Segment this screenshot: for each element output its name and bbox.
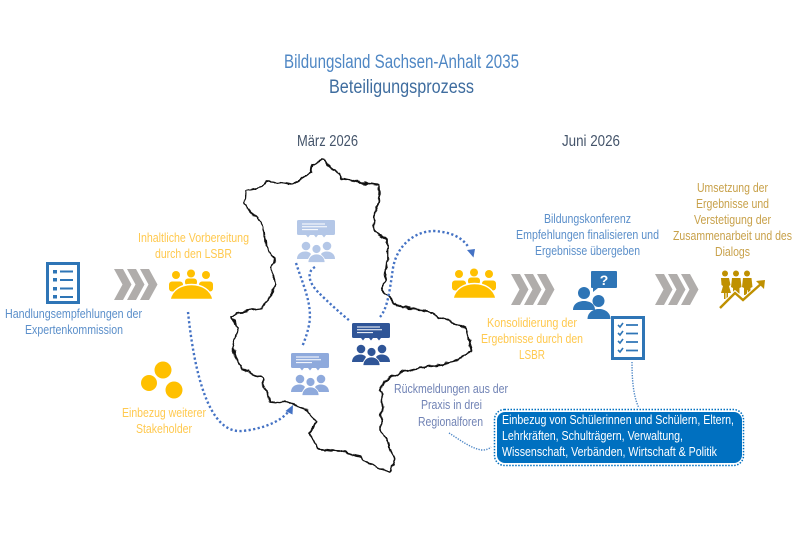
text: Umsetzung: Dialogs — [715, 244, 750, 259]
arrow: dotted Rückmeldungen to box — [449, 433, 491, 450]
arrow: dotted north to south — [296, 263, 310, 347]
text: Bildungskonferenz: Bildungskonferenz — [544, 211, 631, 226]
text: Handlungsempfehlungen: Expertenkommission — [25, 322, 123, 337]
title — [284, 52, 519, 98]
callout: Einbezug: Lehrkräften, Schulträgern, Verwaltung, — [502, 428, 683, 443]
arrow: chevrons 1 — [114, 269, 158, 300]
map outline: Sachsen-Anhalt — [231, 160, 472, 472]
icon: forum centre — [352, 323, 390, 366]
date: Juni 2026: Juni 2026 — [562, 133, 620, 150]
text: Umsetzung: Ergebnisse und — [696, 196, 769, 211]
date: März 2026: März 2026 — [297, 133, 358, 150]
icon: stakeholder circles — [141, 362, 182, 398]
text: Inhaltliche Vorbereitung — [138, 230, 249, 261]
text: Handlungsempfehlungen — [5, 306, 143, 337]
text: Inhaltliche Vorbereitung: durch den LSBR — [155, 246, 232, 261]
icon: people with question: ? — [600, 272, 608, 288]
icon: people with rising arrow — [720, 270, 765, 308]
text: Rückmeldungen — [394, 381, 509, 429]
callout: Einbezug — [494, 410, 744, 466]
title: Bildungsland Sachsen-Anhalt 2035 — [284, 52, 519, 73]
arrow: chevrons 3 — [655, 274, 698, 305]
title: Beteiligungsprozess — [329, 77, 474, 98]
text: Bildungskonferenz: Empfehlungen finalisieren und — [516, 227, 659, 242]
icon: people with question — [573, 271, 617, 319]
icon: document list — [48, 264, 78, 302]
arrow: dotted north to centre — [310, 267, 350, 321]
callout: Einbezug: Einbezug von Schülerinnen und Schülern, Eltern, — [502, 412, 734, 427]
text: Einbezug weiterer Stakeholder: Stakeholder — [136, 421, 193, 436]
icon: forum south — [291, 353, 329, 396]
icon: meeting table consolidation — [452, 268, 496, 298]
text: Rückmeldungen: Praxis in drei — [421, 397, 482, 412]
text: Bildungskonferenz — [516, 211, 659, 258]
text: Konsolidierung — [481, 315, 583, 362]
text: Bildungskonferenz: Ergebnisse übergeben — [535, 243, 640, 258]
text: Umsetzung — [673, 180, 792, 259]
text: Einbezug weiterer Stakeholder — [122, 405, 207, 436]
arrow: dotted centre to consolidation — [380, 231, 475, 317]
icon: checklist — [612, 318, 644, 358]
text: Handlungsempfehlungen: Handlungsempfehlungen der — [5, 306, 143, 321]
arrow: dotted to south forum — [188, 312, 293, 431]
text: Konsolidierung: Konsolidierung der — [487, 315, 578, 330]
arrow: dotted checklist to box — [632, 362, 639, 408]
text: Konsolidierung: Ergebnisse durch den — [481, 331, 583, 346]
text: Rückmeldungen: Regionalforen — [418, 414, 483, 429]
icon: meeting table LSBR — [169, 270, 213, 300]
arrow: chevrons 2 — [511, 274, 554, 305]
icon: forum north — [297, 220, 335, 262]
text: Einbezug weiterer Stakeholder: Einbezug weiterer — [122, 405, 207, 420]
text: Rückmeldungen: Rückmeldungen aus der — [394, 381, 509, 396]
text: Umsetzung: Verstetigung der — [694, 212, 772, 227]
text: Konsolidierung: LSBR — [519, 347, 545, 362]
text: Umsetzung: Umsetzung der — [697, 180, 769, 195]
callout: Einbezug: Wissenschaft, Verbänden, Wirtschaft & Politik — [502, 444, 717, 459]
text: Inhaltliche Vorbereitung: Inhaltliche Vorbereitung — [138, 230, 249, 245]
